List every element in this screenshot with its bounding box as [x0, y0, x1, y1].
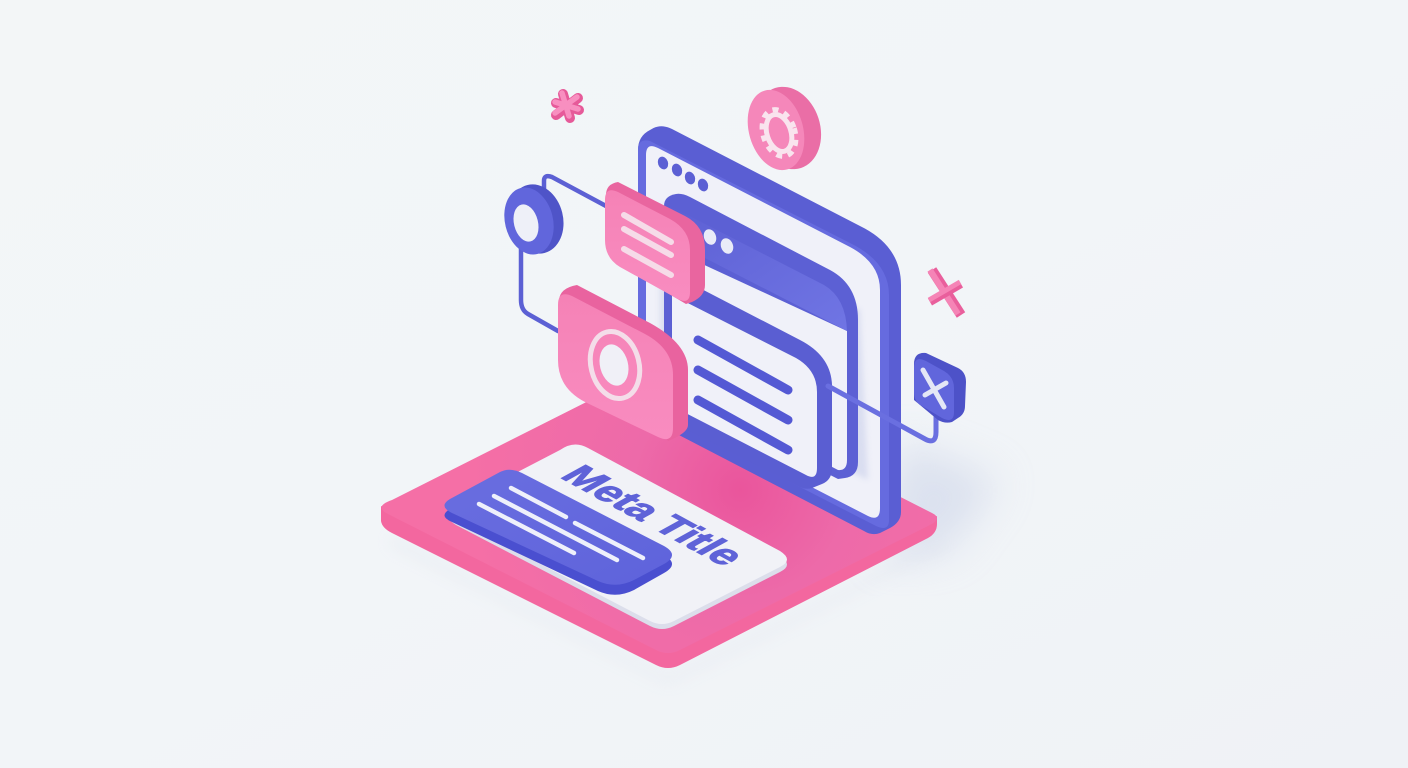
- box depth: [914, 353, 966, 423]
- soft shadows on the ground: [390, 440, 1000, 684]
- icon: pink asterisk: [555, 93, 579, 118]
- platform side: [381, 506, 937, 668]
- purple card depth: [444, 480, 672, 595]
- middle window left strip: [668, 290, 672, 340]
- card face: [558, 294, 673, 439]
- icon: close box: [914, 353, 966, 423]
- box face: [914, 359, 954, 420]
- window dots: [656, 155, 710, 193]
- disc depth: [745, 78, 831, 178]
- icon: gear disc: [739, 78, 831, 178]
- middle window white area: [672, 250, 847, 470]
- window dots white: [702, 227, 735, 256]
- white card depth: [448, 449, 787, 629]
- purple card top: [444, 470, 672, 585]
- panel: pink card with ring: [558, 285, 688, 441]
- connector wire: right: [828, 386, 936, 441]
- middle window header: [670, 206, 847, 331]
- node side: [501, 179, 571, 259]
- purple card lines: [479, 488, 643, 560]
- white x: [923, 370, 946, 407]
- middle window frame: [664, 194, 858, 479]
- panel: pink platform: [381, 372, 937, 668]
- soft shadow of middle window: [660, 205, 868, 480]
- panel: front content window: [670, 283, 832, 489]
- text lines: [698, 340, 788, 450]
- ring: [583, 326, 647, 404]
- node face: [497, 182, 561, 260]
- gear: [756, 105, 802, 161]
- card lines: [624, 215, 671, 275]
- front window frame: [670, 283, 832, 489]
- connector wire: left loop: [521, 176, 606, 331]
- card depth: [559, 285, 688, 441]
- back window frame: [638, 126, 901, 534]
- back window rim: [638, 140, 889, 528]
- panel: meta title card: [444, 444, 787, 629]
- disc face: [739, 83, 813, 177]
- panel: middle browser window: [660, 194, 868, 480]
- ring centre: [595, 341, 633, 389]
- card face: [605, 190, 690, 301]
- platform top: [381, 372, 937, 653]
- card depth: [606, 182, 705, 304]
- title text: Meta Title: [551, 459, 756, 571]
- icon: pink x: [929, 270, 961, 315]
- front window white panel: [672, 295, 817, 477]
- panel: pink card with lines: [605, 182, 705, 304]
- node centre: [510, 202, 542, 244]
- white card top: [448, 444, 787, 624]
- icon: circular node: [497, 179, 571, 260]
- panel: back browser window: [638, 126, 901, 534]
- back window white panel: [646, 146, 880, 518]
